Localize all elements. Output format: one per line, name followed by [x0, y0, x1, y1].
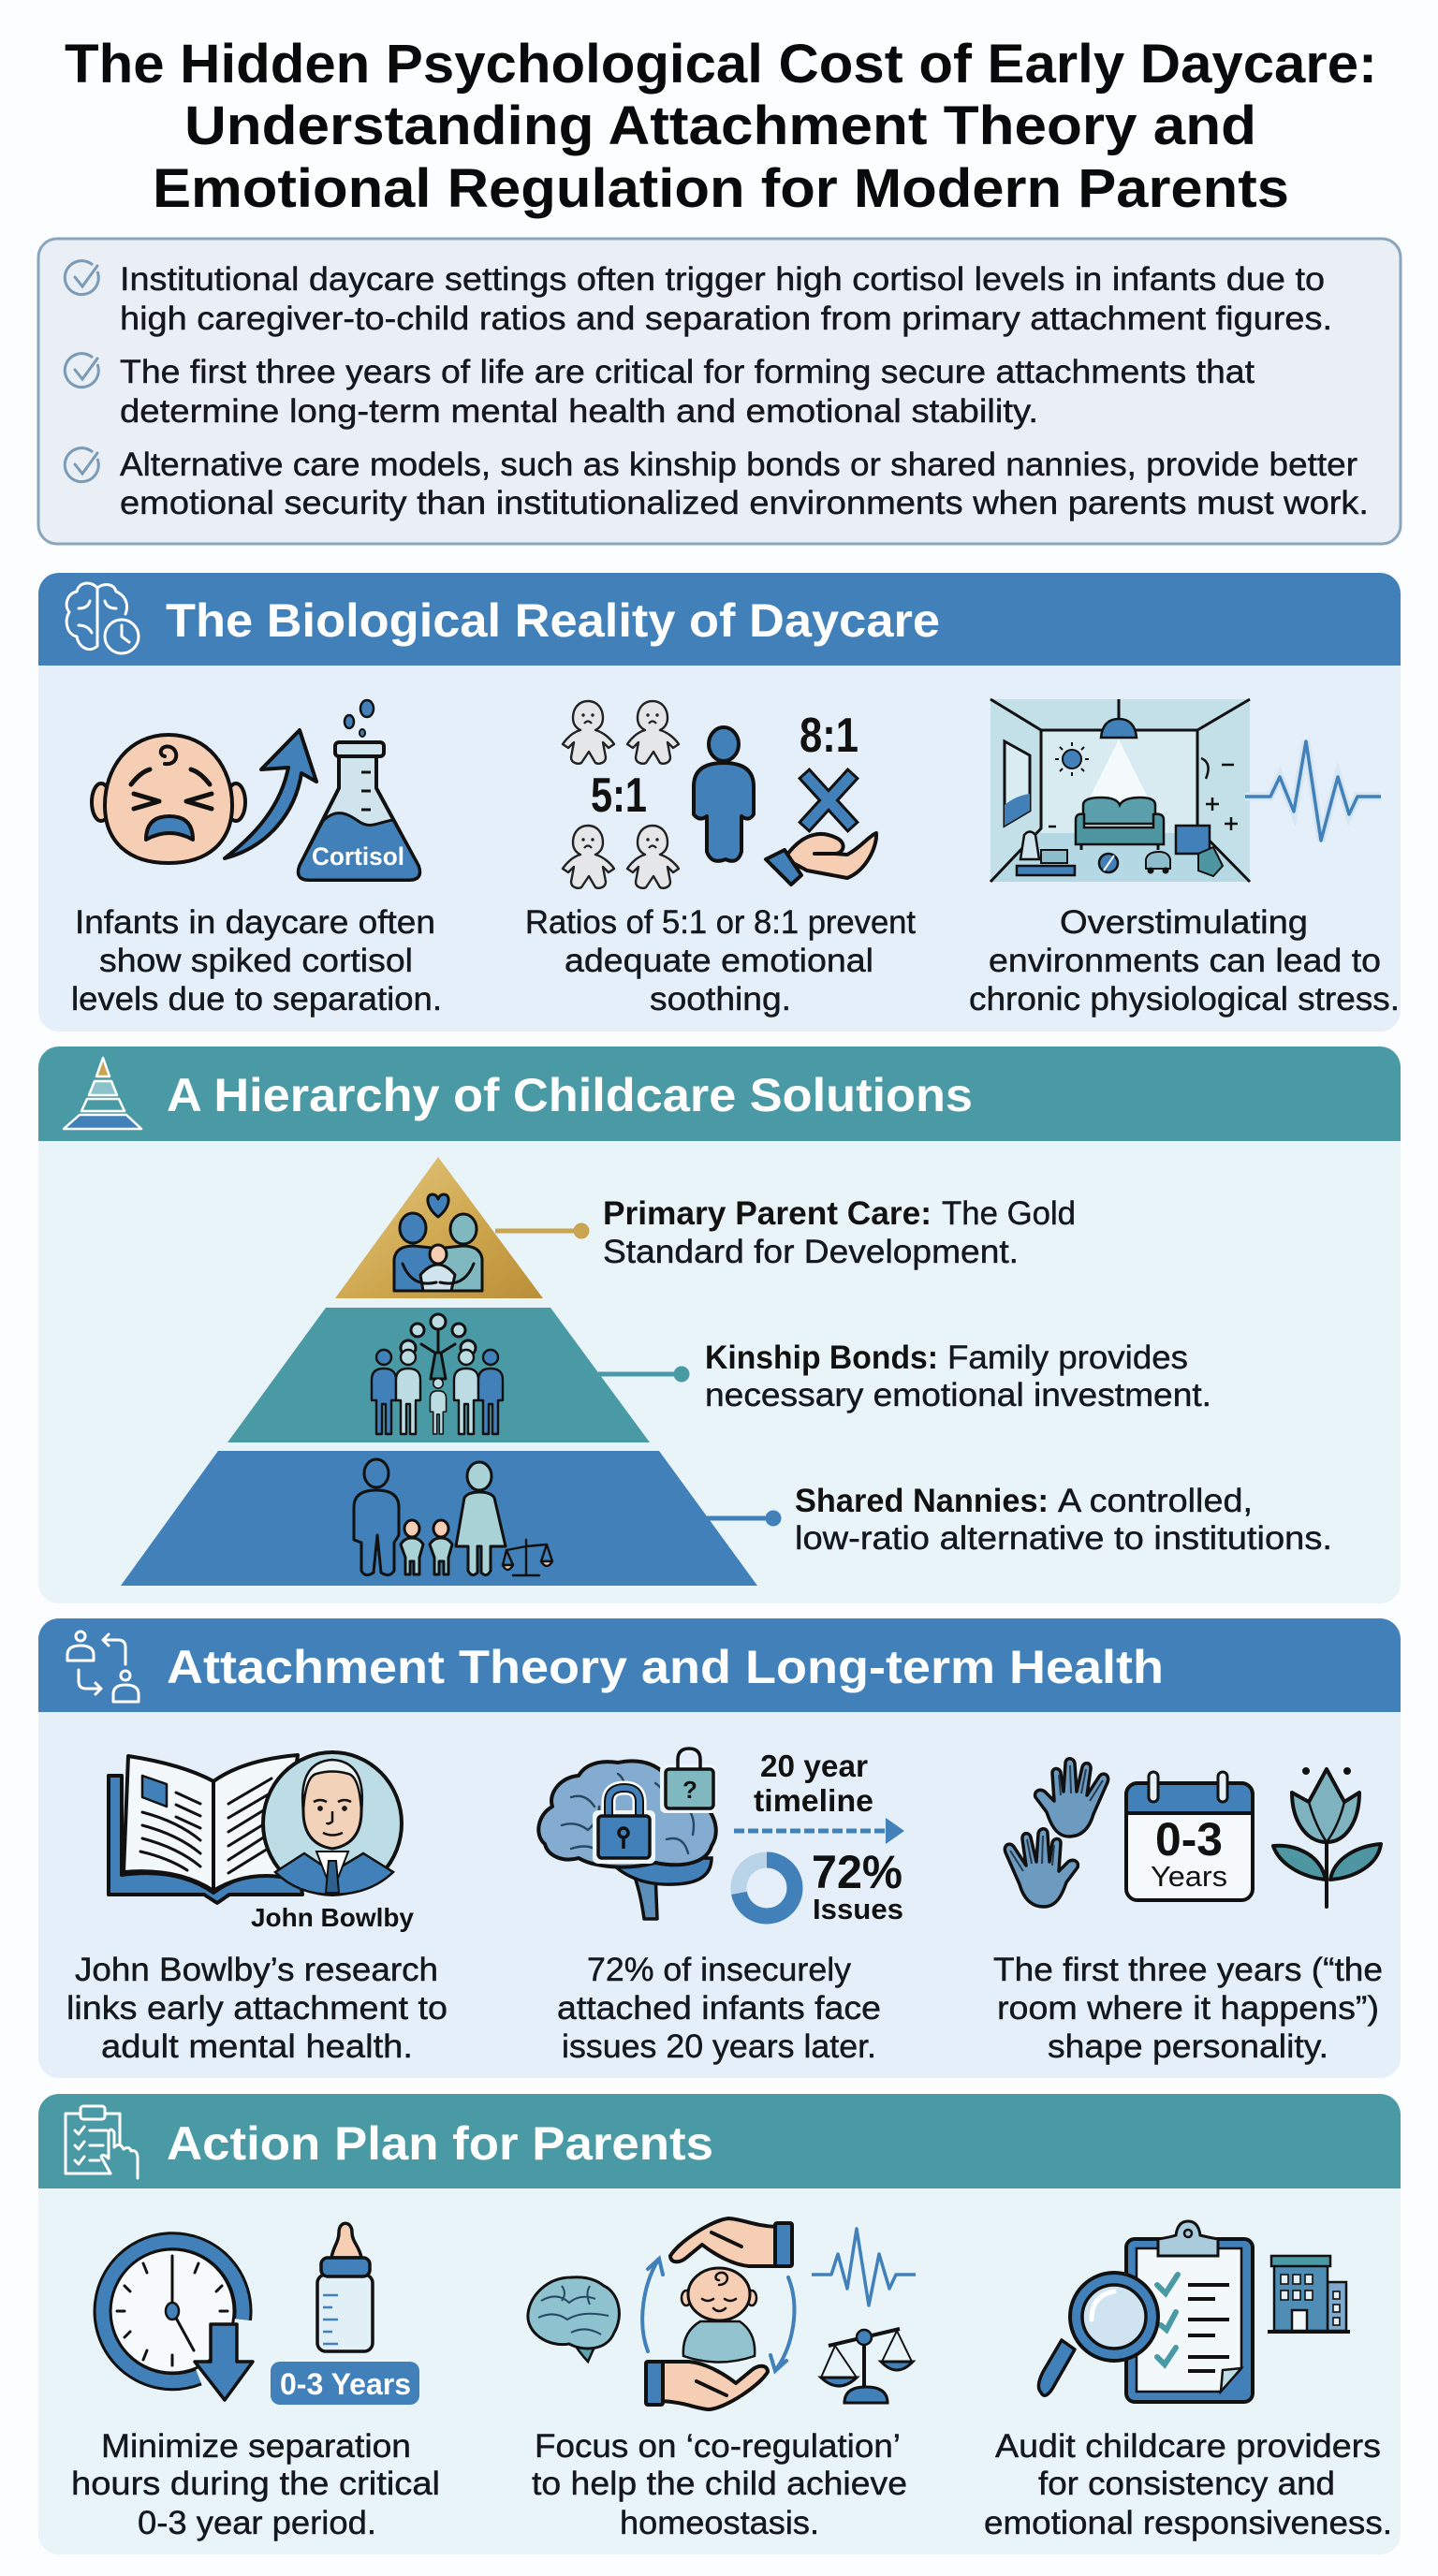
label: kinship bonds: necessary emotional investment.: [705, 1377, 1211, 1413]
donut chart: 72 percent: [739, 1860, 795, 1916]
caption: audit providers: [984, 2428, 1392, 2541]
icon: cortisol flask: [299, 700, 419, 880]
caption: environment: environments can lead to: [989, 943, 1381, 979]
caption: co-regulation: [532, 2428, 907, 2541]
icon: caregiver: [694, 727, 754, 861]
label: kinship bonds: Family provides: [947, 1339, 1188, 1376]
label: primary parent care: Standard for Development.: [603, 1234, 1019, 1270]
caption: cortisol: show spiked cortisol: [99, 943, 413, 979]
caption: cortisol: [71, 904, 442, 1017]
ratio 5:1: 5:1: [591, 768, 647, 823]
label: shared nannies: Shared Nannies:: [795, 1483, 1049, 1519]
timeline label: timeline: [754, 1783, 873, 1818]
badge: 0-3 years: 0-3 Years: [280, 2367, 411, 2401]
panel: action plan: [38, 2094, 1401, 2554]
ratio 8:1: 8:1: [800, 709, 858, 763]
icon: stress pulse: [1245, 741, 1381, 841]
caption: environment: Overstimulating: [1060, 904, 1308, 941]
section header bar: [38, 573, 1401, 666]
stat: 72% issues: Issues: [813, 1893, 903, 1925]
caption: environment: chronic physiological stress.: [969, 981, 1400, 1017]
icon: small brain: [528, 2277, 619, 2362]
label: primary parent care: [603, 1195, 1076, 1270]
caption: co-regulation: Focus on ‘co-regulation’: [535, 2428, 901, 2465]
bullet 1: high caregiver-to-child ratios and separation from primary attachment figures.: [120, 300, 1332, 337]
bullet 2: [120, 354, 1255, 430]
icon: hands: [1005, 1759, 1108, 1907]
title: The Hidden Psychological Cost of Early Daycare:: [65, 34, 1377, 95]
icon: John Bowlby portrait: [251, 1752, 414, 1932]
icon: attachment loop: [67, 1632, 139, 1702]
caption: minimize separation: Minimize separation: [101, 2428, 411, 2465]
portrait name: John Bowlby: [251, 1903, 414, 1932]
icon: overstimulating room: [990, 699, 1250, 882]
icon: crying baby: [92, 735, 245, 863]
bullet 3: Alternative care models, such as kinship bonds or shared nannies, provide better: [120, 446, 1357, 483]
label: kinship bonds: Kinship Bonds:: [705, 1339, 938, 1376]
arrows: regulation cycle: [642, 2259, 794, 2371]
heading: A Hierarchy of Childcare Solutions: [167, 1069, 973, 1121]
heading: Attachment Theory and Long-term Health: [167, 1641, 1164, 1693]
section header bar: [38, 2094, 1401, 2188]
title: [65, 34, 1377, 219]
icon: open book: [109, 1755, 302, 1903]
caption: first three years: The first three years (“the: [993, 1952, 1383, 1988]
panel: attachment theory: [38, 1618, 1401, 2078]
icon: family tree: [372, 1314, 503, 1434]
caption: 72 percent: [557, 1952, 881, 2065]
icon: ratio babies: [563, 701, 679, 888]
caption: minimize separation: 0-3 year period.: [138, 2505, 376, 2541]
flask label: Cortisol: [312, 842, 404, 871]
caption: Bowlby: [66, 1952, 448, 2065]
caption: minimize separation: [71, 2428, 440, 2541]
heading: Action Plan for Parents: [167, 2117, 713, 2170]
icon: magnifier: [1038, 2273, 1158, 2395]
caption: 72 percent: attached infants face: [557, 1990, 881, 2027]
icon: open hand: [766, 833, 876, 885]
caption: audit providers: emotional responsiveness.: [984, 2505, 1392, 2541]
label: shared nannies: [795, 1483, 1332, 1557]
label: kinship bonds: [705, 1339, 1211, 1413]
caption: ratios: [525, 904, 916, 1017]
caption: environment: [969, 904, 1400, 1017]
icon: x mark: [809, 779, 848, 822]
panel: hierarchy of childcare solutions: [38, 1046, 1401, 1603]
caption: ratios: adequate emotional: [565, 943, 873, 979]
icon: brain and clock: [66, 583, 139, 653]
pyramid tier: primary parent care: [335, 1157, 543, 1298]
icon: pulse: [812, 2229, 916, 2305]
timeline label: [754, 1749, 873, 1818]
caption: audit providers: for consistency and: [1038, 2466, 1335, 2502]
label: shared nannies: low-ratio alternative to institutions.: [795, 1520, 1332, 1557]
bullet 1: [120, 261, 1332, 337]
caption: first three years: [993, 1952, 1383, 2065]
icon: calendar 0-3 years: [1126, 1772, 1253, 1900]
bullet 1: Institutional daycare settings often trigger high cortisol levels in infants due to: [120, 261, 1325, 298]
icon: calendar 0-3 years: 0-3: [1155, 1813, 1223, 1866]
big padlock: [593, 1788, 655, 1864]
caption: 72 percent: 72% of insecurely: [587, 1952, 852, 1988]
bullet 3: emotional security than institutionalized environments when parents must work.: [120, 485, 1369, 521]
stat: 72% issues: 72%: [812, 1846, 902, 1898]
panel: key takeaways: [38, 239, 1401, 544]
caption: ratios: Ratios of 5:1 or 8:1 prevent: [525, 904, 916, 941]
icon: clipboard: [1126, 2221, 1253, 2402]
label: primary parent care: Primary Parent Care:: [603, 1195, 932, 1232]
section header bar: [38, 1618, 1401, 1712]
small padlock: [660, 1749, 717, 1813]
icon: parents and baby: [394, 1194, 482, 1291]
icon: calendar 0-3 years: Years: [1151, 1860, 1227, 1893]
icon: rising arrow: [225, 730, 316, 858]
arrow: dashed timeline: [734, 1818, 904, 1844]
icon: check 2: [65, 354, 98, 388]
icon: tulip: [1273, 1769, 1381, 1907]
bullet 2: determine long-term mental health and emotional stability.: [120, 393, 1038, 430]
icon: small pyramid: [64, 1058, 141, 1129]
icon: baby bottle: [317, 2223, 373, 2351]
caption: ratios: soothing.: [650, 981, 791, 1017]
icon: caring hands: [646, 2218, 792, 2409]
bullet 3: [120, 446, 1369, 521]
icon: clock: [103, 2241, 253, 2400]
icon: building: [1268, 2256, 1350, 2332]
icon: balance scale: [821, 2329, 913, 2403]
badge: 0-3 years: [271, 2362, 419, 2405]
caption: co-regulation: homeostasis.: [620, 2505, 819, 2541]
caption: 72 percent: issues 20 years later.: [562, 2028, 876, 2065]
timeline label: 20 year: [760, 1749, 868, 1783]
caption: first three years: room where it happens”): [997, 1990, 1379, 2027]
caption: Bowlby: links early attachment to: [66, 1990, 448, 2027]
icon: check 3: [65, 448, 98, 482]
title: Understanding Attachment Theory and: [184, 95, 1256, 156]
caption: co-regulation: to help the child achieve: [532, 2466, 907, 2502]
panel: biological reality: [38, 573, 1401, 1032]
icon: brain with locks: [538, 1749, 717, 1919]
connector: blue: [707, 1511, 781, 1526]
title: Emotional Regulation for Modern Parents: [153, 158, 1289, 219]
label: primary parent care: The Gold: [942, 1195, 1076, 1232]
icon: nanny and children: [354, 1459, 552, 1575]
heading: The Biological Reality of Daycare: [166, 594, 940, 647]
section header bar: [38, 1046, 1401, 1141]
caption: cortisol: levels due to separation.: [71, 981, 442, 1017]
caption: cortisol: Infants in daycare often: [75, 904, 435, 941]
icon: calm baby: [682, 2268, 756, 2363]
stat: 72% issues: [812, 1846, 903, 1925]
caption: minimize separation: hours during the critical: [71, 2466, 440, 2502]
bullet 2: The first three years of life are critical for forming secure attachments that: [120, 354, 1255, 390]
pyramid tier: shared nannies: [121, 1451, 757, 1586]
connector: teal: [598, 1367, 689, 1382]
connector: gold: [495, 1222, 590, 1239]
icon: check 1: [65, 261, 98, 295]
small padlock: ?: [682, 1776, 697, 1804]
caption: audit providers: Audit childcare providers: [995, 2428, 1381, 2465]
caption: Bowlby: adult mental health.: [101, 2028, 413, 2065]
label: shared nannies: A controlled,: [1058, 1483, 1253, 1519]
icon: checklist with hand: [66, 2106, 138, 2178]
caption: first three years: shape personality.: [1048, 2028, 1328, 2065]
caption: Bowlby: John Bowlby’s research: [75, 1952, 438, 1988]
pyramid tier: kinship bonds: [227, 1308, 650, 1442]
arrow: reduce hours: [195, 2324, 253, 2400]
